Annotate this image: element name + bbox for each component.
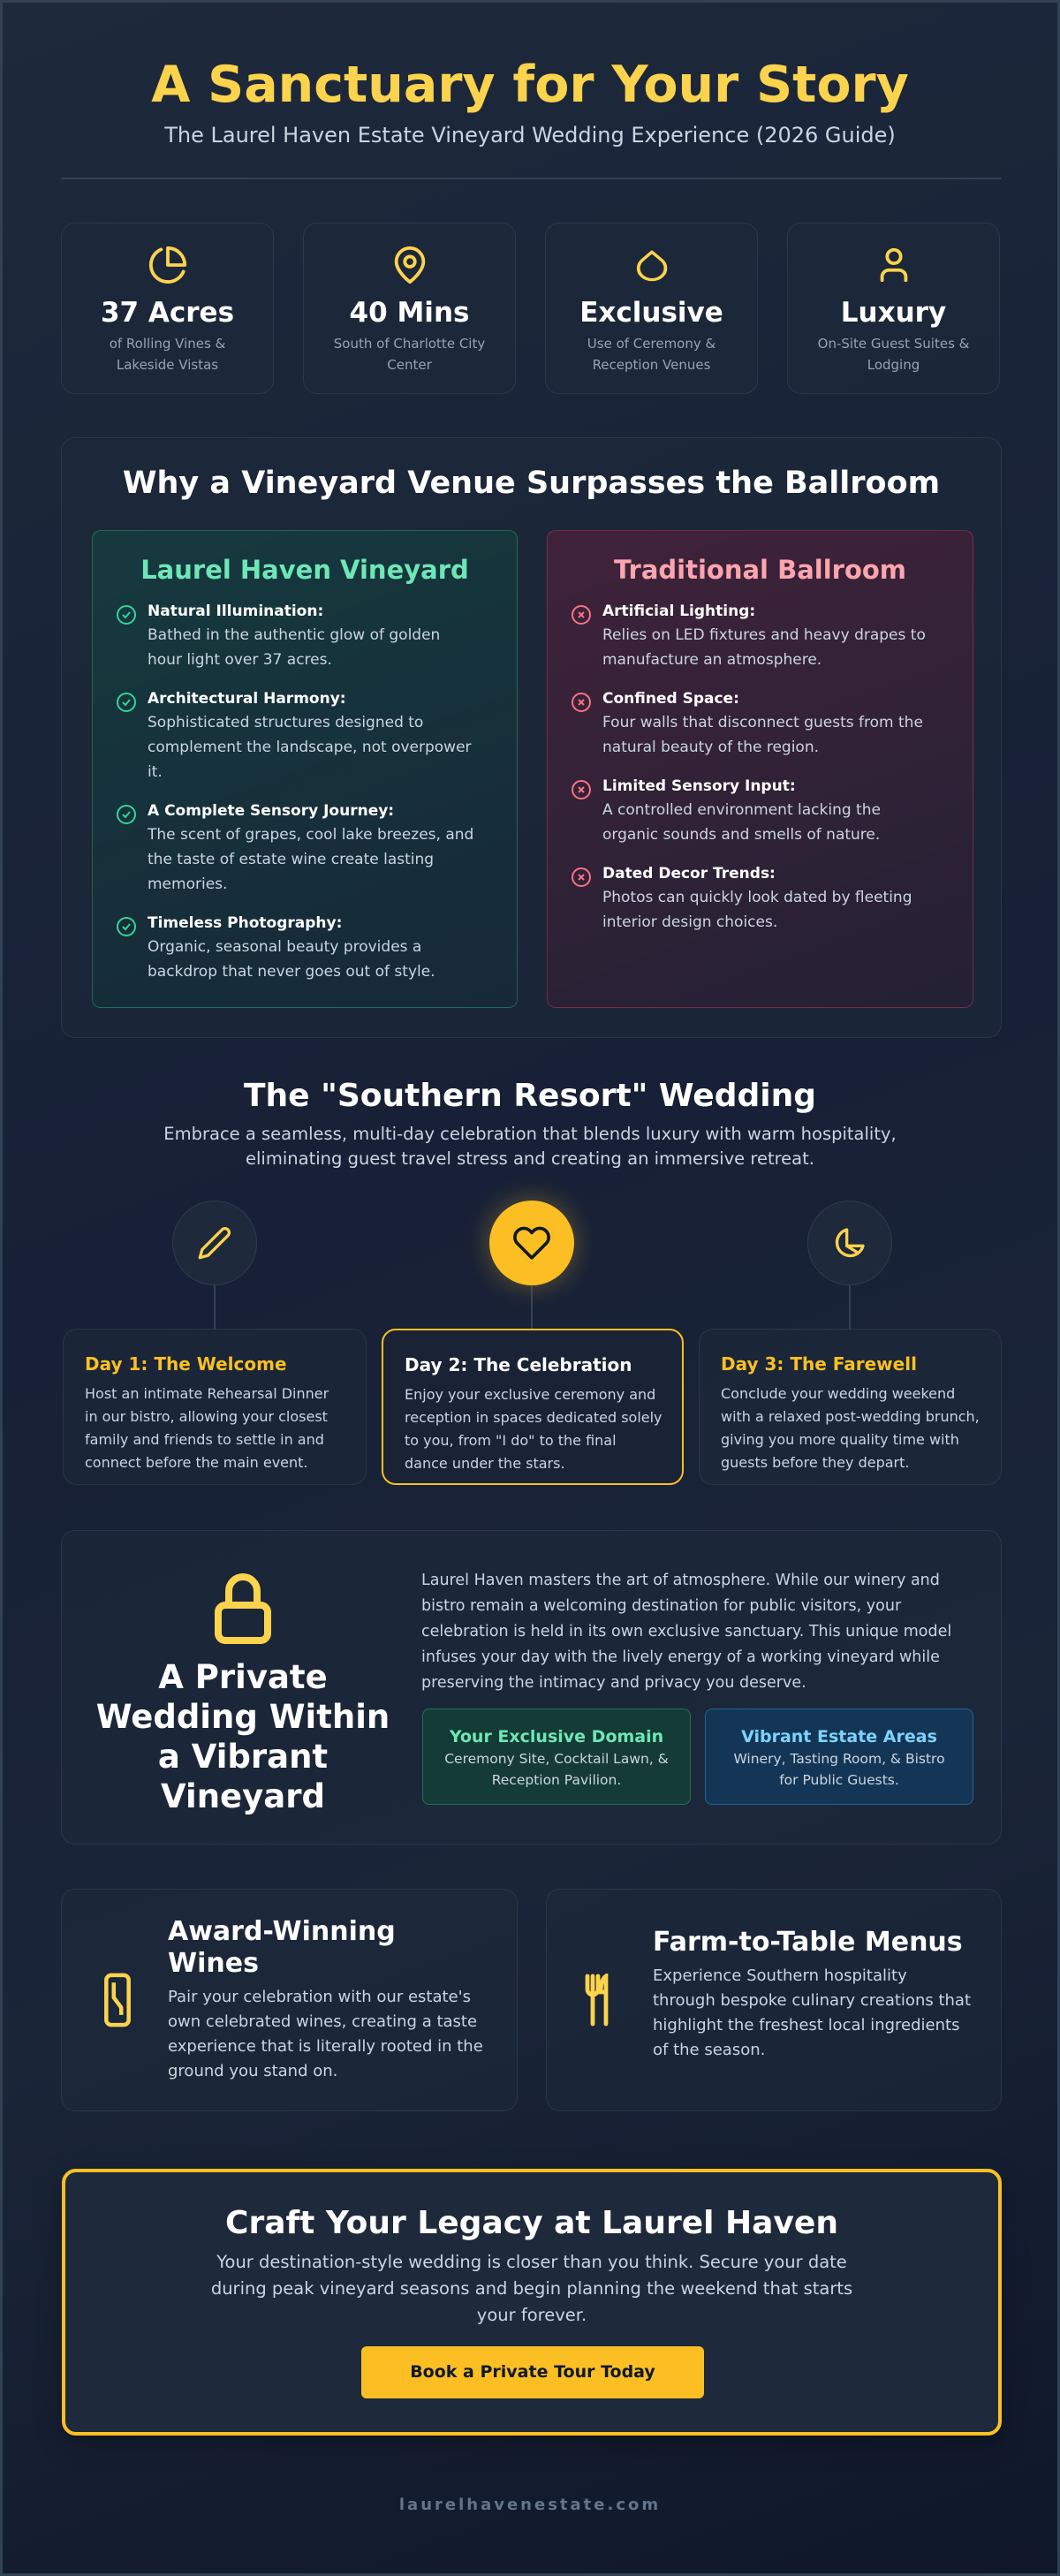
- card: wines: [61, 1889, 518, 2111]
- text: cta: Your destination-style wedding is closer than you think. Secure your date during peak vineyard seasons and begin planning the weekend that starts your forever.: [211, 2252, 852, 2325]
- column: vineyard: Sophisticated structures designed to complement the landscape, not overpower it.: [148, 714, 472, 781]
- heading: comparison: Why a Vineyard Venue Surpasses the Ballroom: [123, 466, 940, 501]
- card: day 3: Day 3: The Farewell: [721, 1353, 917, 1375]
- stat card: mins: 40 Mins: [350, 297, 469, 329]
- icon: lock: [215, 1573, 271, 1644]
- card: day 2: Enjoy your exclusive ceremony and reception in spaces dedicated solely to you, from "I do" to the final: [405, 1386, 662, 1449]
- column: vineyard: Architectural Harmony:: [148, 690, 346, 708]
- column: vineyard: The scent of grapes, cool lake breezes, and the taste of estate wine create lasting memories.: [148, 826, 473, 893]
- column: vineyard: Bathed in the authentic glow of golden hour light over 37 acres.: [148, 626, 440, 669]
- stat card: acres: [61, 223, 274, 394]
- stat card: exclusive: Use of Ceremony & Reception Venues: [587, 336, 716, 373]
- box: vibrant areas: [705, 1708, 973, 1805]
- footer: laurelhavenestate.com: [399, 2496, 661, 2514]
- box: vibrant areas: Winery, Tasting Room, & Bistro: [733, 1751, 945, 1767]
- box: exclusive domain: Ceremony Site, Cocktail Lawn, &: [444, 1751, 669, 1767]
- stat card: exclusive: [545, 223, 758, 394]
- card: day 1: Day 1: The Welcome: [85, 1353, 287, 1375]
- button: book tour: [361, 2346, 704, 2398]
- stat card: acres: of Rolling Vines & Lakeside Vistas: [110, 336, 225, 373]
- card: day 1: Host an intimate Rehearsal Dinner in our bistro, allowing your closest family and friends to settle in and connect before the main event.: [85, 1385, 329, 1471]
- icon: farewell: [807, 1201, 892, 1285]
- icon: wine: [104, 1974, 131, 2027]
- heading: southern resort: The "Southern Resort" Wedding: [244, 1078, 816, 1114]
- column: ballroom: [547, 530, 973, 1008]
- box: exclusive domain: Reception Pavilion.: [492, 1772, 621, 1788]
- card: day 2: [382, 1329, 684, 1485]
- column: vineyard: Organic, seasonal beauty provides a backdrop that never goes out of style.: [148, 938, 435, 981]
- column: ballroom: Relies on LED fixtures and heavy drapes to manufacture an atmosphere.: [602, 626, 926, 669]
- icon: pin: [394, 246, 426, 284]
- card: menus: [546, 1889, 1002, 2111]
- box: vibrant areas: Vibrant Estate Areas: [741, 1727, 937, 1746]
- icon: utensils: [585, 1974, 608, 2027]
- stat card: exclusive: Exclusive: [579, 297, 723, 329]
- icon: pie: [148, 246, 187, 284]
- icon: user: [880, 247, 908, 283]
- stat card: mins: South of Charlotte City Center: [334, 336, 485, 373]
- column: ballroom: Dated Decor Trends:: [602, 865, 776, 883]
- card: day 1: [63, 1329, 367, 1485]
- subtitle: The Laurel Haven Estate Vineyard Wedding Experience (2026 Guide): [164, 123, 896, 148]
- stat card: luxury: [787, 223, 1000, 394]
- column: vineyard: A Complete Sensory Journey:: [148, 802, 394, 820]
- box: exclusive domain: Your Exclusive Domain: [450, 1727, 663, 1746]
- column: ballroom: A controlled environment lacking the organic sounds and smells of nature.: [602, 801, 881, 844]
- column: ballroom: Confined Space:: [602, 690, 739, 708]
- heading: private: A Private Wedding Within a Vibrant Vineyard: [96, 1658, 390, 1815]
- panel: call to action: [62, 2169, 1002, 2436]
- column: vineyard: Natural Illumination:: [148, 602, 323, 620]
- icon: heart: [489, 1201, 574, 1285]
- icon: drop: [636, 251, 668, 281]
- panel: comparison: [61, 437, 1002, 1038]
- column: ballroom: Four walls that disconnect guests from the natural beauty of the region.: [602, 714, 923, 756]
- box: vibrant areas: for Public Guests.: [779, 1772, 899, 1788]
- card: day 3: Conclude your wedding weekend with a relaxed post-wedding brunch, giving you more quality time with guests before they depart.: [721, 1385, 980, 1471]
- column: ballroom: Limited Sensory Input:: [602, 777, 796, 795]
- column: vineyard: Laurel Haven Vineyard: [140, 555, 469, 585]
- heading: cta: Craft Your Legacy at Laurel Haven: [225, 2205, 838, 2241]
- title: A Sanctuary for Your Story: [151, 56, 909, 114]
- card: day 2: Day 2: The Celebration: [405, 1354, 632, 1375]
- card: menus: Farm-to-Table Menus: [653, 1927, 963, 1958]
- column: vineyard: [92, 530, 518, 1008]
- card: wines: Pair your celebration with our estate's own celebrated wines, creating a taste experience that is literally rooted in the ground you stand on.: [168, 1988, 483, 2080]
- card: day 3: [699, 1329, 1002, 1485]
- card: wines: Award-Winning Wines: [168, 1916, 396, 1979]
- card: day 2: dance under the stars.: [405, 1455, 565, 1472]
- column: ballroom: Traditional Ballroom: [614, 555, 906, 585]
- stat card: luxury: On-Site Guest Suites & Lodging: [818, 336, 969, 373]
- button: book tour: Book a Private Tour Today: [410, 2362, 655, 2382]
- icon: pencil: [172, 1201, 257, 1285]
- text: southern intro: Embrace a seamless, multi-day celebration that blends luxury with warm hospitality, eliminating guest travel stress and creating an immersive retreat.: [163, 1124, 897, 1169]
- box: exclusive domain: [422, 1708, 691, 1805]
- column: ballroom: Photos can quickly look dated by fleeting interior design choices.: [602, 889, 912, 931]
- stat card: luxury: Luxury: [841, 297, 946, 329]
- card: menus: Experience Southern hospitality through bespoke culinary creations that highlight the freshest local ingredients of the season.: [653, 1966, 971, 2059]
- stat card: mins: [303, 223, 516, 394]
- column: vineyard: Timeless Photography:: [148, 914, 342, 932]
- text: private: Laurel Haven masters the art of atmosphere. While our winery and bistro remain a welcoming destination for public visitors, your celebration is held in its own exclusive sanctuary. This unique model infuses your day with the lively energy of a working vineyard while preserving the intimacy and privacy you deserve.: [421, 1572, 951, 1692]
- panel: private wedding: [61, 1530, 1002, 1845]
- column: ballroom: Artificial Lighting:: [602, 602, 755, 620]
- stat card: acres: 37 Acres: [101, 297, 234, 329]
